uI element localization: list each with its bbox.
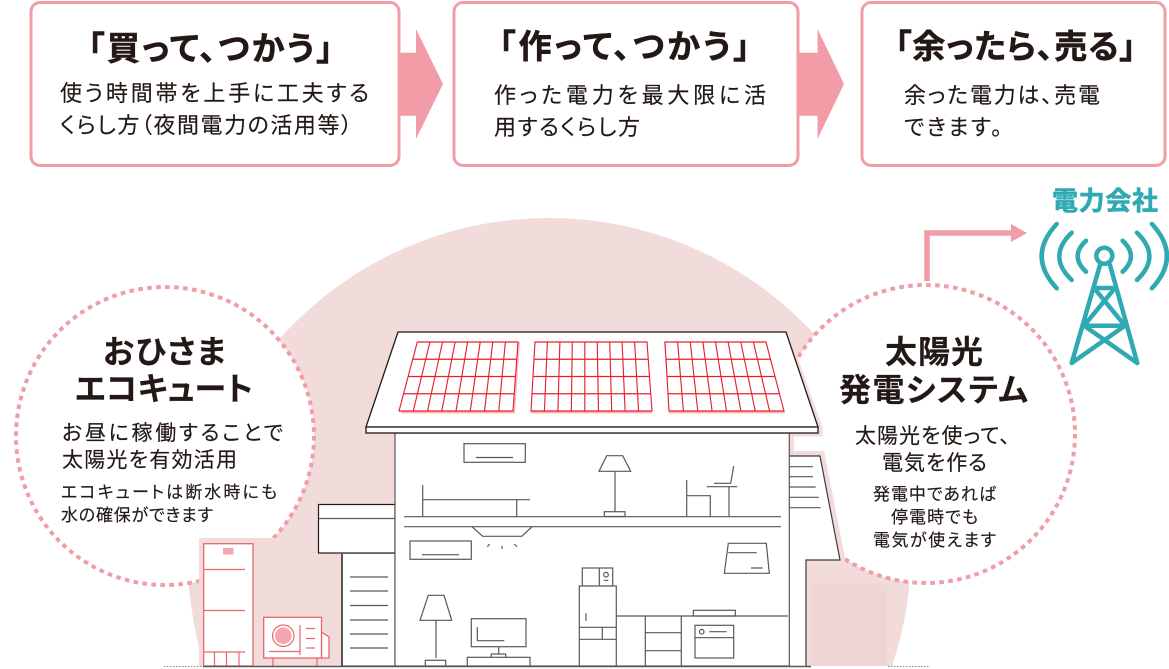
text: make and use description: 用するくらし方 <box>494 115 640 140</box>
right wing of house <box>789 456 840 666</box>
heading: EcoCute: おひさま <box>103 334 226 370</box>
floor lamp: upstairs <box>599 456 631 516</box>
arrow: first step <box>399 29 443 139</box>
text: solar note: 発電中であれば <box>873 485 996 504</box>
background: pink patch behind water heater <box>199 538 289 666</box>
callout: solar power system <box>777 285 1075 583</box>
water heater tank <box>204 544 253 666</box>
air conditioner: downstairs <box>410 541 471 559</box>
heat pump outdoor unit <box>264 617 329 666</box>
ground line <box>164 666 930 668</box>
text: EcoCute note <box>61 483 277 525</box>
heading: make and use: 「作って、つかう」 <box>499 28 750 65</box>
heading: solar power system: 太陽光 <box>885 334 983 370</box>
text: solar note: 電気が使えます <box>873 530 996 550</box>
heading: sell surplus: 「余ったら、売る」 <box>895 28 1136 65</box>
solar panel: right <box>664 342 785 414</box>
arrow: to power company <box>924 224 1027 281</box>
heading: solar power system: 発電システム <box>839 372 1028 408</box>
roof <box>366 332 818 433</box>
solar panel: centre <box>531 342 652 414</box>
bed <box>423 485 530 516</box>
air conditioner: upstairs <box>464 444 525 462</box>
text: sell surplus description: 余った電力は、売電 <box>904 83 1100 108</box>
icon: transmission tower <box>1042 224 1167 363</box>
text: sell surplus description <box>904 83 1100 140</box>
text: make and use description: 作った電力を最大限に活 <box>494 83 766 108</box>
television <box>467 619 530 666</box>
kitchen counter <box>616 610 788 666</box>
text: EcoCute note: エコキュートは断水時にも <box>61 483 277 502</box>
text: EcoCute description <box>62 422 283 472</box>
text: solar description <box>855 425 1010 475</box>
text: sell surplus description: できます。 <box>904 115 1002 140</box>
panel: sell surplus <box>862 2 1165 166</box>
heading: EcoCute <box>75 334 253 407</box>
house walls <box>395 433 789 666</box>
label: power company: 電力会社 <box>1052 186 1158 216</box>
heading: solar power system <box>839 334 1028 408</box>
floor lamp: downstairs <box>420 595 452 666</box>
background: pink dome <box>188 218 910 666</box>
text: EcoCute description: お昼に稼働することで <box>62 422 283 445</box>
text: buy and use description: くらし方（夜間電力の活用等） <box>60 113 352 138</box>
panel: buy and use <box>31 2 399 166</box>
text: EcoCute note: 水の確保ができます <box>61 506 213 525</box>
solar panel: left <box>399 342 520 414</box>
range hood <box>724 543 769 573</box>
text: solar note: 停電時でも <box>891 508 978 527</box>
heading: buy and use: 「買って、つかう」 <box>88 30 333 67</box>
background: pink patch beside house <box>812 585 887 666</box>
arrow: second step <box>798 29 844 139</box>
background: pink fringe along house edge <box>786 332 843 561</box>
heading: EcoCute: エコキュート <box>75 371 253 407</box>
ceiling light <box>472 527 532 549</box>
text: make and use description <box>494 83 766 140</box>
desk and chair <box>687 466 737 516</box>
callout: ohisama EcoCute <box>16 287 314 585</box>
text: solar description: 電気を作る <box>882 452 987 475</box>
left wing of house <box>318 504 395 666</box>
text: solar note <box>873 485 996 550</box>
text: buy and use description: 使う時間帯を上手に工夫する <box>60 81 369 106</box>
panel: make and use <box>454 2 798 166</box>
text: solar description: 太陽光を使って、 <box>855 425 1010 448</box>
refrigerator and microwave <box>579 568 616 666</box>
text: buy and use description <box>60 81 369 138</box>
text: EcoCute description: 太陽光を有効活用 <box>62 449 237 472</box>
upstairs floor and ceiling <box>404 517 781 527</box>
